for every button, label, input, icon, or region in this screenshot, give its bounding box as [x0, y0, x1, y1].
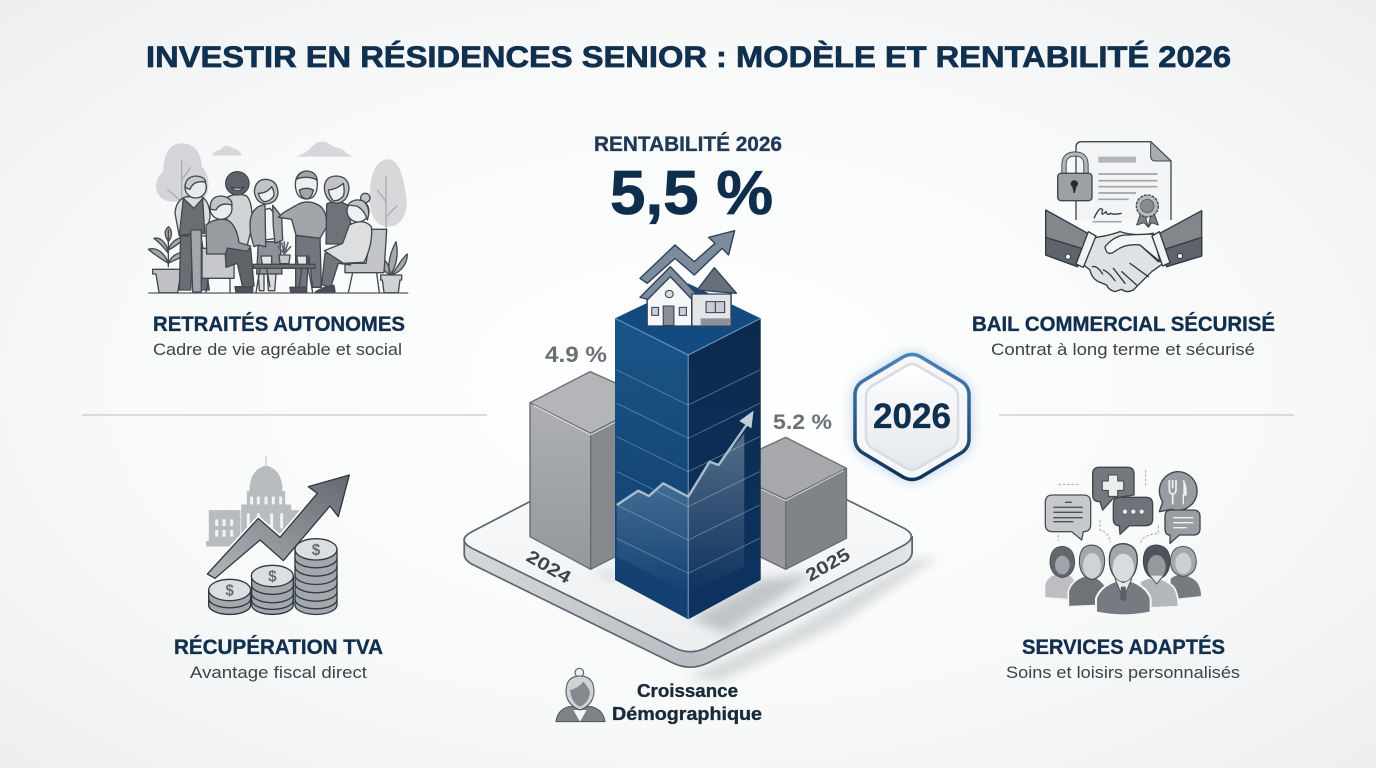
- speech bubble: dots: [1113, 497, 1153, 534]
- description: Avantage fiscal direct: [190, 663, 367, 682]
- person: seated woman: [315, 193, 387, 293]
- value 2025: 5.2 %: [773, 411, 832, 434]
- value 2024: 4.9 %: [545, 342, 607, 367]
- person right back: [1170, 546, 1202, 600]
- coin stack small: [209, 579, 251, 614]
- year 2024: 2024: [523, 546, 575, 587]
- icon: capitol, arrow and coins: [207, 457, 349, 614]
- coin stack small: $: [225, 582, 234, 599]
- bar 2025: [719, 437, 846, 569]
- bar 2024: [530, 372, 654, 569]
- croissance démographique: [556, 668, 762, 724]
- bar 2026: [615, 283, 761, 619]
- heading: SERVICES ADAPTÉS: [1022, 636, 1225, 659]
- year 2025: 2025: [802, 544, 854, 585]
- title: INVESTIR EN RÉSIDENCES SENIOR : MODÈLE ET RENTABILITÉ 2026: [146, 40, 1231, 74]
- panel: services adaptés: [1006, 467, 1240, 682]
- speech bubble: cutlery: [1159, 472, 1197, 512]
- speech bubble: medical cross: [1093, 467, 1134, 510]
- heading: RETRAITÉS AUTONOMES: [153, 313, 405, 336]
- windows: [217, 497, 282, 537]
- description: Contrat à long terme et sécurisé: [991, 340, 1255, 359]
- person second right: [1140, 545, 1178, 608]
- icon: speech bubbles and people: [1045, 467, 1202, 615]
- coin stack medium: $: [268, 569, 277, 586]
- plant right: [377, 242, 407, 293]
- badge: 2026: 2026: [873, 397, 951, 436]
- coin stack medium: [251, 565, 293, 614]
- text: Croissance: [637, 681, 738, 701]
- panel: bail commercial: [972, 142, 1275, 359]
- capitol building: [207, 457, 300, 546]
- coin stack tall: [295, 539, 337, 614]
- person: standing man with vest: [175, 176, 210, 292]
- speech bubble: text: [1045, 495, 1091, 540]
- rentability headline: [594, 133, 782, 228]
- person left back: [1045, 546, 1077, 600]
- icon: senior woman: [556, 668, 605, 722]
- coffee table: [253, 242, 315, 293]
- handshake: [1046, 210, 1202, 292]
- text: Démographique: [612, 704, 762, 724]
- badge: 2026: [855, 354, 969, 480]
- panel: récupération TVA: [174, 457, 383, 682]
- plant left: [148, 227, 187, 293]
- icon: group of seniors: [148, 142, 408, 293]
- description: Cadre de vie agréable et social: [153, 340, 402, 359]
- platform: [464, 420, 912, 667]
- contract document: [1076, 142, 1171, 222]
- big number: 5,5 %: [610, 159, 773, 228]
- description: Soins et loisirs personnalisés: [1006, 663, 1240, 682]
- person second left: [1068, 545, 1110, 607]
- person: standing man dark: [225, 172, 252, 245]
- house and arrow on top: [640, 231, 736, 326]
- lock: [1058, 154, 1092, 201]
- arrow halo: [207, 475, 349, 578]
- person: woman at right: [324, 176, 351, 244]
- speech bubble: lines: [1165, 510, 1200, 543]
- heading: BAIL COMMERCIAL SÉCURISÉ: [972, 313, 1275, 336]
- isometric bar chart: [464, 231, 938, 682]
- person: standing man with beard: [278, 171, 327, 292]
- chart line on bar: [617, 411, 754, 593]
- icon: contract, lock and handshake: [1046, 142, 1202, 292]
- seal: [1136, 195, 1158, 227]
- coin stack tall: $: [312, 542, 321, 559]
- label: RENTABILITÉ 2026: [594, 133, 782, 156]
- growth arrow: [207, 475, 349, 578]
- heading: RÉCUPÉRATION TVA: [174, 636, 383, 659]
- person centre: [1096, 544, 1151, 615]
- person: standing woman: [250, 179, 283, 291]
- person: seated man: [202, 196, 254, 293]
- panel: retraités autonomes: [148, 142, 408, 359]
